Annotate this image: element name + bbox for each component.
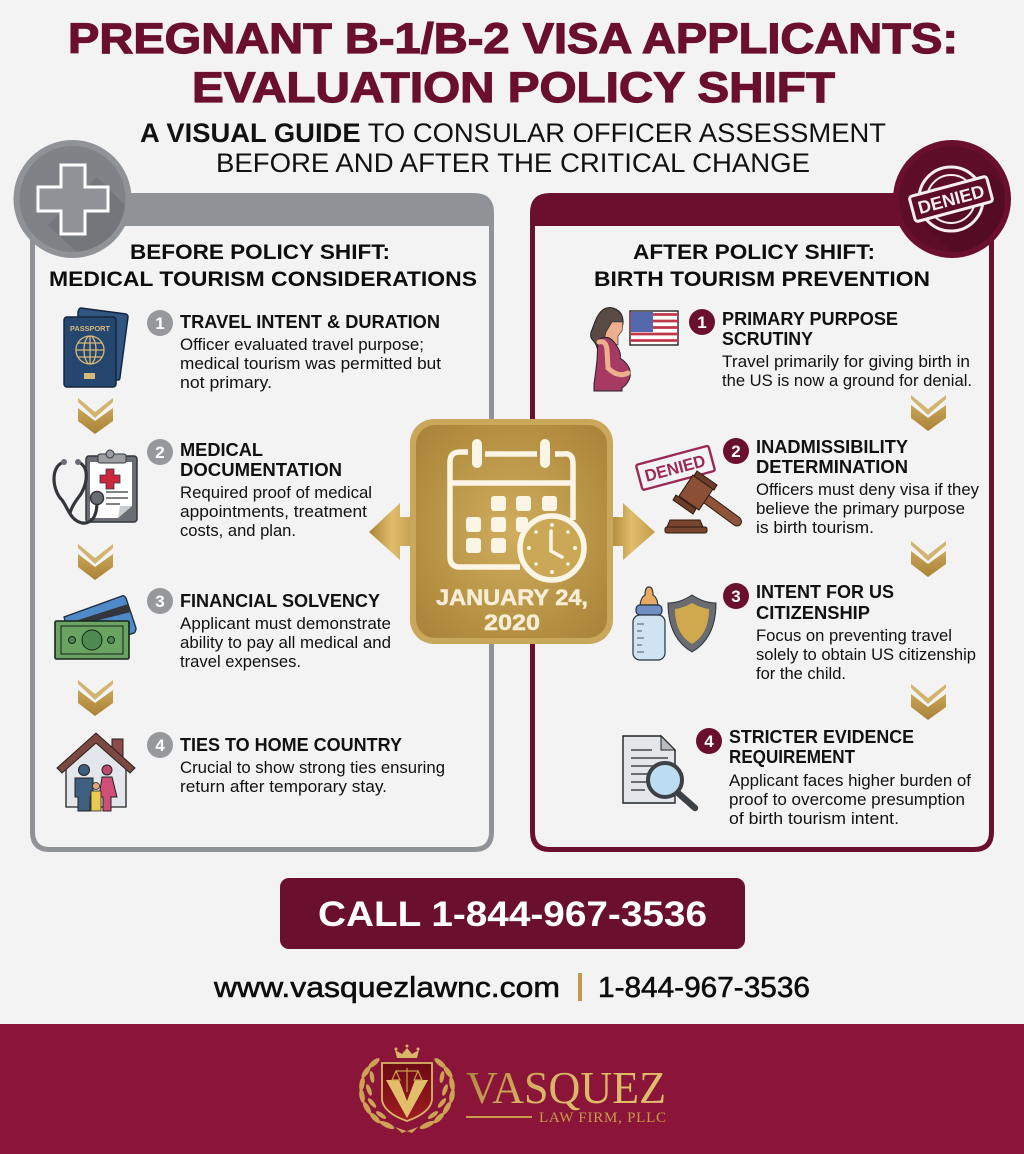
step 4 <box>696 726 971 828</box>
step text <box>722 353 972 390</box>
step 4 <box>147 732 445 796</box>
arrow: left <box>369 503 415 560</box>
icon: document and magnifier <box>623 736 695 808</box>
call to action button: CALL 1-844-967-3536 <box>318 895 707 934</box>
arrow: right <box>608 503 655 560</box>
step text: appointments, treatment <box>180 503 367 521</box>
step text: travel expenses. <box>180 653 301 671</box>
step text: Travel primarily for giving birth in <box>722 353 970 371</box>
number badge: 1 <box>697 313 707 332</box>
subtitle <box>140 118 886 178</box>
step text: Applicant faces higher burden of <box>729 772 971 790</box>
step heading <box>722 308 898 349</box>
number badge <box>696 728 722 754</box>
step heading: REQUIREMENT <box>729 746 856 767</box>
heading: before: MEDICAL TOURISM CONSIDERATIONS <box>49 268 477 291</box>
panel frame: before <box>30 193 494 852</box>
icon: stethoscope and clipboard <box>54 450 137 523</box>
laurel wreath <box>358 1057 456 1133</box>
step text <box>756 627 976 683</box>
wordmark: VASQUEZ <box>466 1062 666 1113</box>
date card <box>410 419 613 644</box>
step text: for the child. <box>756 665 846 683</box>
icon: house with family <box>57 733 135 811</box>
date text: JANUARY 24, <box>436 585 588 610</box>
icon: passport: PASSPORT <box>70 324 110 333</box>
step text <box>729 772 971 828</box>
step text: costs, and plan. <box>180 522 296 540</box>
icon: denied stamp and gavel <box>636 446 742 533</box>
icon: calendar with clock <box>450 439 584 580</box>
step text <box>180 759 445 796</box>
step 2 <box>723 436 980 537</box>
heading: after: BIRTH TOURISM PREVENTION <box>594 268 930 291</box>
step text: Focus on preventing travel <box>756 627 952 645</box>
arrow: chevron 1 <box>911 395 946 431</box>
number badge: 2 <box>155 443 165 462</box>
title <box>68 15 958 112</box>
number badge <box>723 583 749 609</box>
gavel <box>665 471 742 533</box>
number badge <box>147 310 173 336</box>
number badge <box>147 732 173 758</box>
step text: Required proof of medical <box>180 484 372 502</box>
step heading: INTENT FOR US <box>756 581 894 602</box>
center date callout <box>369 419 655 644</box>
shield <box>668 595 716 652</box>
step text: not primary. <box>180 374 272 392</box>
call to action button <box>280 878 745 949</box>
arrow: chevron 2 <box>78 544 113 580</box>
footer band <box>0 1024 1024 1154</box>
step heading: DETERMINATION <box>756 456 908 477</box>
step text: medical tourism was permitted but <box>180 355 441 373</box>
step text: ability to pay all medical and <box>180 634 391 652</box>
step 1 <box>689 308 972 390</box>
step text: Officers must deny visa if they <box>756 481 980 499</box>
step heading: SCRUTINY <box>722 328 814 349</box>
icon: denied stamp badge <box>893 140 1011 260</box>
date text <box>436 585 588 635</box>
title: EVALUATION POLICY SHIFT <box>192 64 835 112</box>
step heading: MEDICAL <box>180 439 263 460</box>
number badge <box>723 438 749 464</box>
baby bottle <box>633 587 665 660</box>
icon: medical cross badge <box>14 140 132 260</box>
arrow: chevron 1 <box>78 398 113 434</box>
contact line: 1-844-967-3536 <box>598 972 810 1004</box>
icon: pregnant woman and US flag <box>591 308 678 391</box>
step heading <box>729 726 914 767</box>
number badge <box>147 439 173 465</box>
arrow: chevron 3 <box>78 680 113 716</box>
icon: passport <box>64 308 128 387</box>
step heading: FINANCIAL SOLVENCY <box>180 590 381 611</box>
step text <box>756 481 980 537</box>
number badge: 3 <box>155 592 165 611</box>
step 3 <box>723 581 976 683</box>
number badge: 4 <box>704 732 714 751</box>
heading: before <box>49 241 477 291</box>
logo: Vasquez Law Firm <box>358 1044 666 1133</box>
number badge: 1 <box>155 314 165 333</box>
step heading <box>756 436 909 477</box>
step heading: TRAVEL INTENT & DURATION <box>180 311 440 332</box>
step heading <box>756 581 894 623</box>
number badge <box>147 588 173 614</box>
number badge: 3 <box>731 587 741 606</box>
step heading: STRICTER EVIDENCE <box>729 726 914 747</box>
step text: proof to overcome presumption <box>729 791 965 809</box>
arrow: chevron 3 <box>911 684 946 720</box>
step heading <box>180 439 342 480</box>
panel: after policy shift <box>530 140 1011 852</box>
step text: Officer evaluated travel purpose; <box>180 336 424 354</box>
step text: believe the primary purpose <box>756 500 965 518</box>
logo: Vasquez Law Firm: LAW FIRM, PLLC <box>539 1110 666 1126</box>
US flag <box>630 311 678 345</box>
step heading: INADMISSIBILITY <box>756 436 909 457</box>
step 3 <box>147 588 391 671</box>
number badge: 2 <box>731 442 741 461</box>
denied stamp: DENIED <box>643 451 708 486</box>
step text: solely to obtain US citizenship <box>756 646 976 664</box>
number badge: 4 <box>155 736 165 755</box>
step heading: CITIZENSHIP <box>756 602 870 623</box>
panel: before policy shift <box>14 140 494 852</box>
pregnant woman <box>591 308 630 391</box>
step text: is birth tourism. <box>756 519 874 537</box>
step text: return after temporary stay. <box>180 778 387 796</box>
subtitle: BEFORE AND AFTER THE CRITICAL CHANGE <box>216 148 810 178</box>
icon: denied stamp badge: DENIED <box>916 181 987 218</box>
number badge <box>689 309 715 335</box>
step text <box>180 484 372 540</box>
date text: 2020 <box>484 610 540 635</box>
subtitle: A VISUAL GUIDE TO CONSULAR OFFICER ASSESSMENT <box>140 118 886 148</box>
icon: baby bottle and shield <box>633 587 716 660</box>
arrow: chevron 2 <box>911 541 946 577</box>
step text <box>180 336 441 392</box>
step heading: DOCUMENTATION <box>180 459 342 480</box>
heading: after: AFTER POLICY SHIFT: <box>633 241 875 264</box>
step 2 <box>147 439 372 540</box>
heading: after <box>594 241 930 291</box>
step text: Applicant must demonstrate <box>180 615 391 633</box>
crown <box>394 1044 420 1058</box>
step 1 <box>147 310 441 392</box>
step heading: PRIMARY PURPOSE <box>722 308 898 329</box>
step heading: TIES TO HOME COUNTRY <box>180 734 403 755</box>
step text: the US is now a ground for denial. <box>722 372 972 390</box>
icon: cash and credit card <box>55 596 136 659</box>
shield <box>382 1063 432 1121</box>
step text: Crucial to show strong ties ensuring <box>180 759 445 777</box>
contact line <box>213 972 810 1004</box>
title: PREGNANT B-1/B-2 VISA APPLICANTS: <box>68 15 958 63</box>
step text <box>180 615 391 671</box>
contact line: www.vasquezlawnc.com <box>213 972 560 1004</box>
heading: before: BEFORE POLICY SHIFT: <box>130 241 390 264</box>
panel frame: after <box>530 193 994 852</box>
step text: of birth tourism intent. <box>729 810 899 828</box>
